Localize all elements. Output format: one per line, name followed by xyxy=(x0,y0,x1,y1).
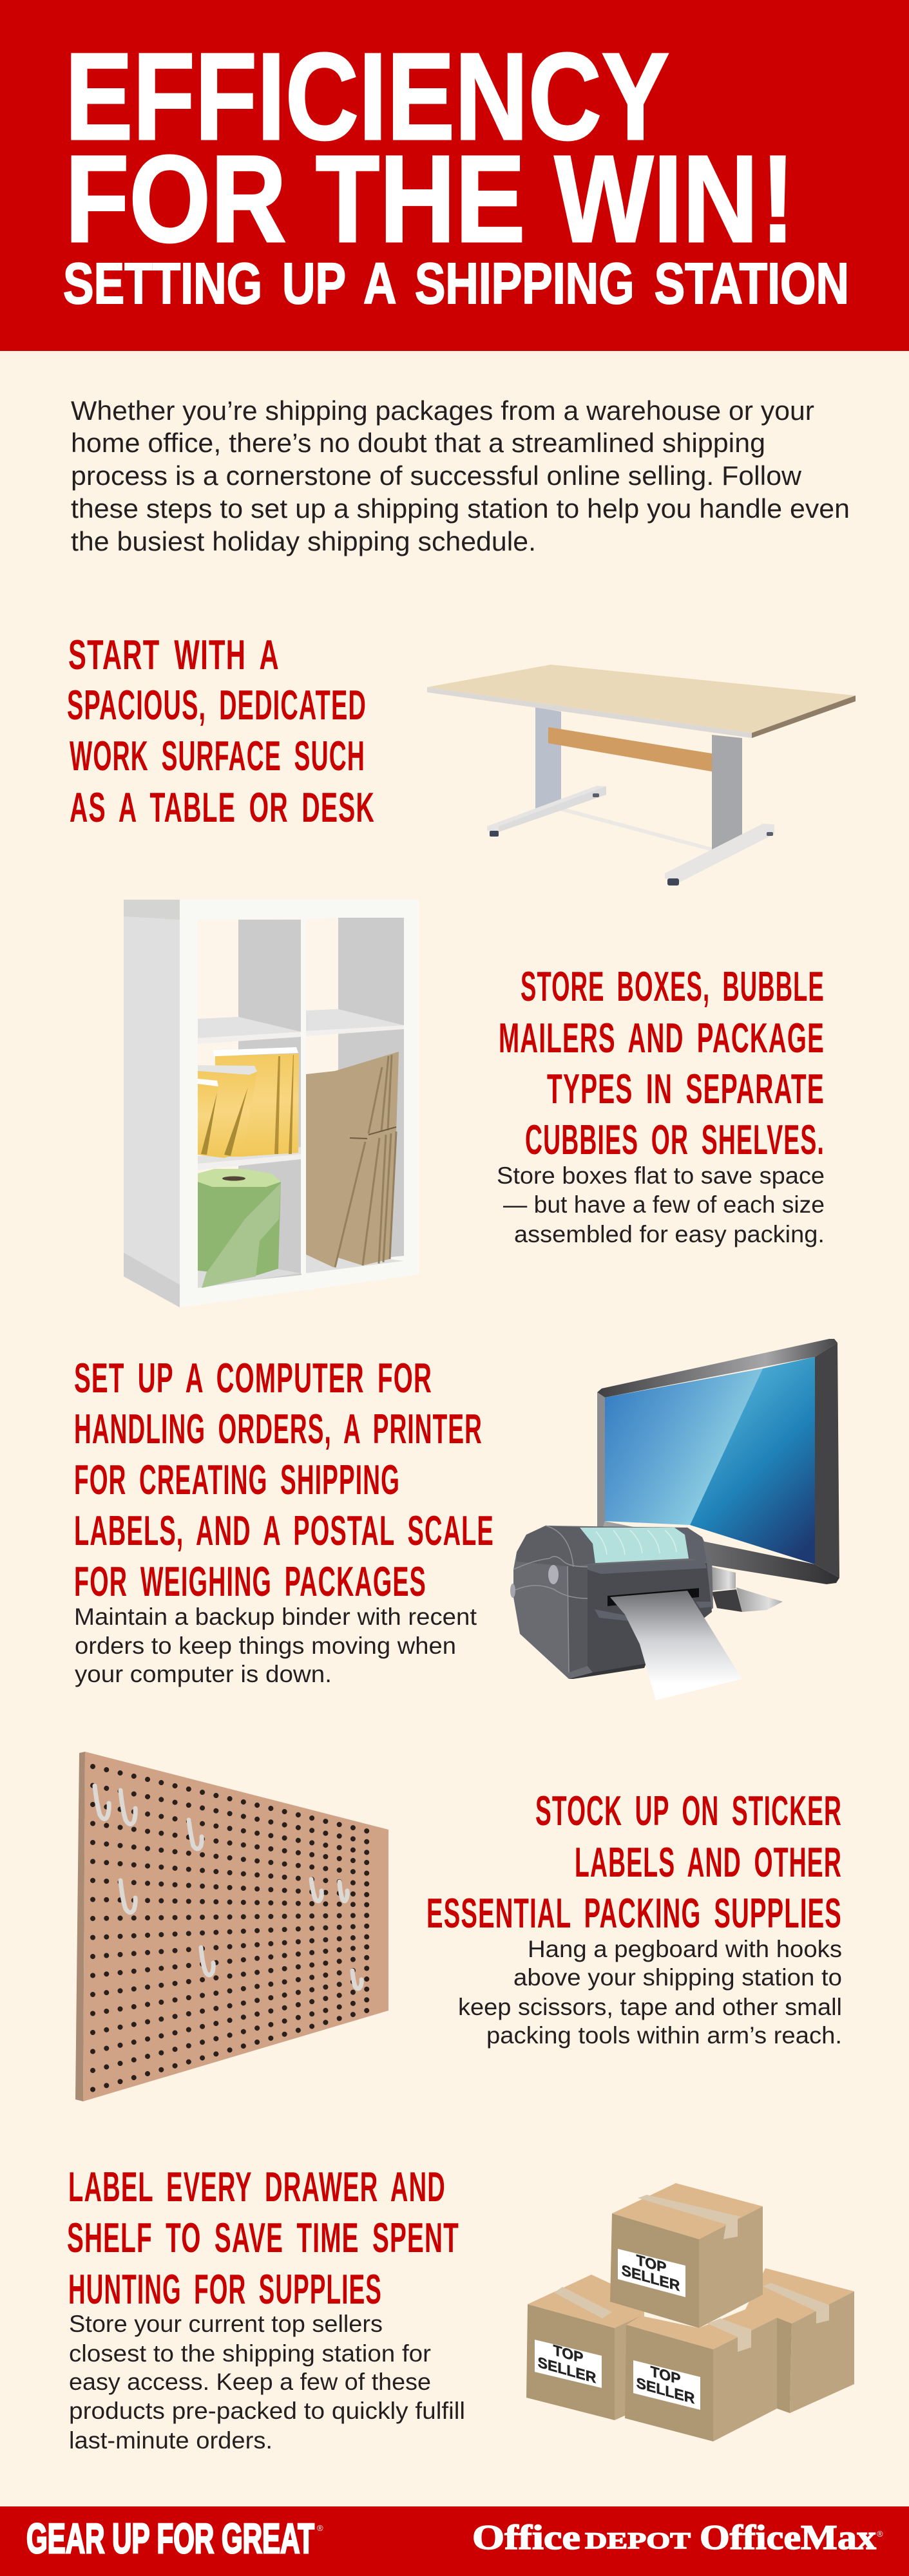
step 2 body text xyxy=(497,1162,825,1247)
step 3 heading: SET UP A COMPUTER FOR xyxy=(74,1354,432,1401)
step 5 body text: Store your current top sellers xyxy=(69,2311,383,2337)
shelf boards xyxy=(198,1017,301,1038)
logo: officemax: OfficeMax xyxy=(700,2518,876,2557)
step 3 heading: HANDLING ORDERS, A PRINTER xyxy=(74,1405,483,1452)
step 2 body text: assembled for easy packing. xyxy=(514,1221,825,1247)
center box: TOP xyxy=(651,2363,680,2387)
step 3 body text: Maintain a backup binder with recent xyxy=(74,1604,477,1630)
back right box xyxy=(745,2268,854,2413)
intro paragraph xyxy=(71,395,850,556)
step 5 body text: easy access. Keep a few of these xyxy=(69,2369,431,2395)
step 3 body text: orders to keep things moving when xyxy=(75,1633,456,1659)
hooks xyxy=(95,1786,361,1989)
step 1 heading: AS A TABLE OR DESK xyxy=(70,784,375,831)
step 2 body text: — but have a few of each size xyxy=(503,1191,825,1218)
title: EFFICIENCY xyxy=(65,27,669,166)
green wrap roll xyxy=(198,1169,281,1288)
illustration: pegboard xyxy=(75,1752,388,2101)
left box: TOP xyxy=(553,2342,583,2366)
step 5 heading: HUNTING FOR SUPPLIES xyxy=(68,2266,382,2313)
paper label xyxy=(610,1591,742,1700)
illustration: storage shelf xyxy=(124,900,419,1307)
header banner xyxy=(0,0,909,351)
flattened cardboard xyxy=(306,1052,399,1267)
step 2 body text: Store boxes flat to save space xyxy=(497,1162,825,1189)
illustration: stacked boxes xyxy=(526,2183,854,2441)
bubble mailers xyxy=(198,1047,299,1158)
step 5 heading xyxy=(67,2163,459,2313)
logo: officemax: ® xyxy=(877,2529,883,2539)
peg holes xyxy=(93,1766,380,2089)
step 5 heading: SHELF TO SAVE TIME SPENT xyxy=(67,2214,459,2261)
step 5 body text: closest to the shipping station for xyxy=(69,2340,431,2367)
step 3 body text: your computer is down. xyxy=(75,1661,332,1687)
step 5 body text: last-minute orders. xyxy=(69,2427,273,2454)
intro paragraph: home office, there’s no doubt that a streamlined shipping xyxy=(71,428,765,458)
top box: TOP xyxy=(636,2251,666,2276)
illustration: label printer xyxy=(510,1526,742,1700)
left box: SELLER xyxy=(538,2354,596,2387)
step 1 heading xyxy=(67,631,375,831)
step 5 body text xyxy=(69,2311,465,2454)
step 1 heading: START WITH A xyxy=(68,631,280,678)
step 3 heading: FOR CREATING SHIPPING xyxy=(74,1456,400,1503)
step 1 heading: SPACIOUS, DEDICATED xyxy=(67,681,367,728)
step 5 heading: LABEL EVERY DRAWER AND xyxy=(68,2163,446,2210)
center box: SELLER xyxy=(636,2374,694,2407)
step 3 heading: FOR WEIGHING PACKAGES xyxy=(74,1558,426,1605)
intro paragraph: these steps to set up a shipping station to help you handle even xyxy=(71,493,850,524)
title: ! xyxy=(761,129,794,268)
title: FOR THE WIN xyxy=(65,129,758,268)
intro paragraph: process is a cornerstone of successful online selling. Follow xyxy=(71,460,802,491)
intro paragraph: Whether you’re shipping packages from a warehouse or your xyxy=(71,395,814,426)
logo: office depot: DEPOT xyxy=(585,2528,691,2553)
left box xyxy=(526,2275,644,2420)
step 3 body text xyxy=(74,1604,477,1687)
step 3 heading: LABELS, AND A POSTAL SCALE xyxy=(74,1507,494,1554)
step 4 body text: keep scissors, tape and other small xyxy=(458,1994,842,2020)
slogan: GEAR UP FOR GREAT xyxy=(26,2515,314,2562)
title xyxy=(65,27,794,268)
top box xyxy=(610,2183,763,2328)
step 4 body text: Hang a pegboard with hooks xyxy=(528,1936,842,1962)
step 1 heading: WORK SURFACE SUCH xyxy=(70,732,365,779)
registered mark: ® xyxy=(317,2523,323,2533)
intro paragraph: the busiest holiday shipping schedule. xyxy=(71,526,536,556)
step 2 heading xyxy=(499,963,825,1163)
step 5 body text: products pre-packed to quickly fulfill xyxy=(69,2398,465,2424)
logo: office depot xyxy=(472,2518,691,2557)
step 4 heading xyxy=(426,1787,842,1937)
top box: SELLER xyxy=(622,2262,680,2295)
step 3 heading xyxy=(74,1354,494,1605)
illustration: monitor xyxy=(597,1339,839,1612)
step 4 body text: packing tools within arm’s reach. xyxy=(486,2022,842,2049)
footer banner xyxy=(0,2506,909,2576)
logo: office depot: Office xyxy=(472,2518,580,2557)
back panels xyxy=(238,918,404,1282)
step 4 body text: above your shipping station to xyxy=(513,1964,842,1991)
step 4 body text xyxy=(458,1936,842,2049)
center box xyxy=(625,2309,777,2441)
illustration: table xyxy=(427,665,856,886)
